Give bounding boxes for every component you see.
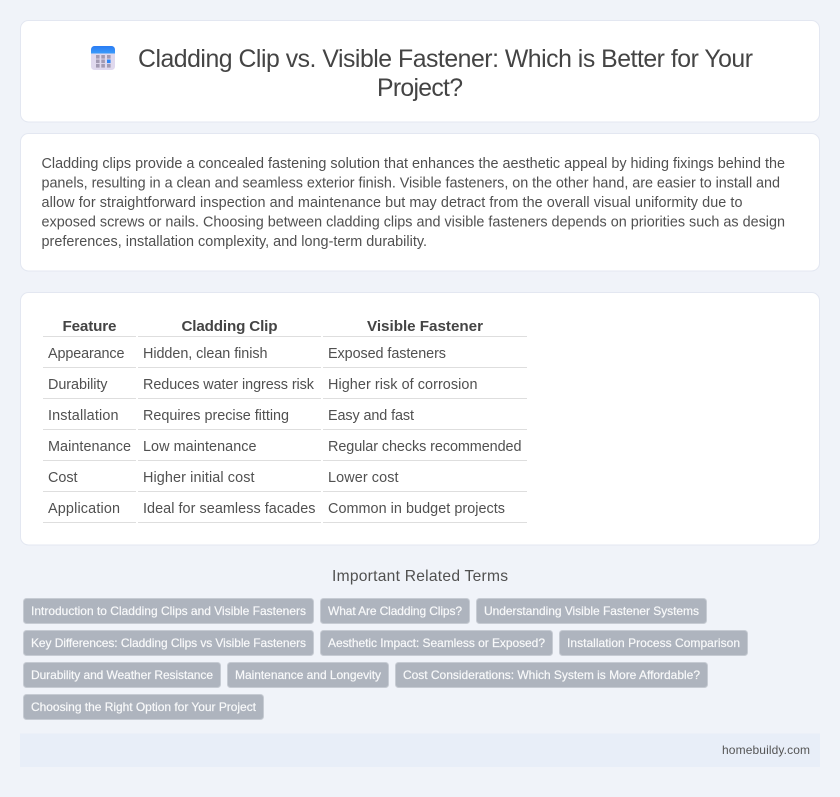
tag [24,694,264,720]
table row: cost: Cost [48,470,78,486]
title: Project? [377,75,463,102]
panel: introduction text [20,134,820,271]
table row: durability [43,377,527,399]
table row: appearance: Hidden, clean finish [143,346,268,362]
table row: appearance: Exposed fasteners [328,346,446,362]
tag [560,630,748,656]
tag: Installation Process Comparison [567,636,740,650]
tag [320,598,470,624]
table header row: Feature [62,318,116,335]
tag: Understanding Visible Fastener Systems [484,604,699,618]
table row: installation: Easy and fast [328,408,414,424]
panel: header [20,20,820,122]
tag [320,630,552,656]
tag: Choosing the Right Option for Your Project [31,700,257,714]
panel: introduction text: preferences, installation complexity, and long-term durability. [42,234,427,250]
tag [24,630,314,656]
table row: cost [43,470,527,492]
tag: What Are Cladding Clips? [328,604,462,618]
table row: application: Application [48,501,120,517]
table header row: Visible Fastener [367,318,483,335]
heading: important related terms: Important Related Terms [332,568,508,585]
table row: maintenance: Maintenance [48,439,131,455]
tag [396,662,708,688]
footer: homebuildy.com [722,743,810,757]
tag [228,662,388,688]
table row: application [43,501,527,523]
table row: durability: Higher risk of corrosion [328,377,478,393]
tag: Maintenance and Longevity [235,668,381,682]
table row: cost: Lower cost [328,470,398,486]
panel: comparison table [20,292,820,545]
tag [24,598,314,624]
table header row: Cladding Clip [182,318,278,335]
title: Cladding Clip vs. Visible Fastener: Which is Better for Your [138,46,753,73]
icon: calendar [91,46,115,70]
tag: Introduction to Cladding Clips and Visible Fasteners [31,604,306,618]
table row: durability: Reduces water ingress risk [143,377,315,393]
panel: introduction text: Cladding clips provide a concealed fastening solution that enhances the aesthetic appeal by hiding fixings behind the [42,156,785,172]
table row: maintenance [43,439,527,461]
table row: appearance: Appearance [48,346,124,362]
tag: Aesthetic Impact: Seamless or Exposed? [328,636,545,650]
panel: related term tags [24,598,748,720]
footer [20,734,820,767]
tag [476,598,706,624]
title [138,46,753,102]
panel: introduction text: exposed screws or nails. Choosing between cladding clips and visible fasteners depends on priorities such as design [42,214,785,230]
tag: Key Differences: Cladding Clips vs Visible Fasteners [31,636,306,650]
panel: introduction text: panels, resulting in a clean and seamless exterior finish. Visible fasteners, on the other hand, are easier to install and [42,176,780,192]
tag [24,662,220,688]
table row: installation: Installation [48,408,118,424]
table row: installation: Requires precise fitting [143,408,289,424]
table row: cost: Higher initial cost [143,470,254,486]
table row: appearance [43,346,527,368]
table row: installation [43,408,527,430]
table row: application: Ideal for seamless facades [143,501,316,517]
tag: Cost Considerations: Which System is More Affordable? [403,668,700,682]
tag: Durability and Weather Resistance [31,668,213,682]
table row: maintenance: Regular checks recommended [328,439,522,455]
table row: maintenance: Low maintenance [143,439,256,455]
panel: introduction text: allow for straightforward inspection and maintenance but may detract from the overall visual uniformity due to [42,195,742,211]
table row: durability: Durability [48,377,108,393]
table row: application: Common in budget projects [328,501,505,517]
table header row [43,318,527,337]
